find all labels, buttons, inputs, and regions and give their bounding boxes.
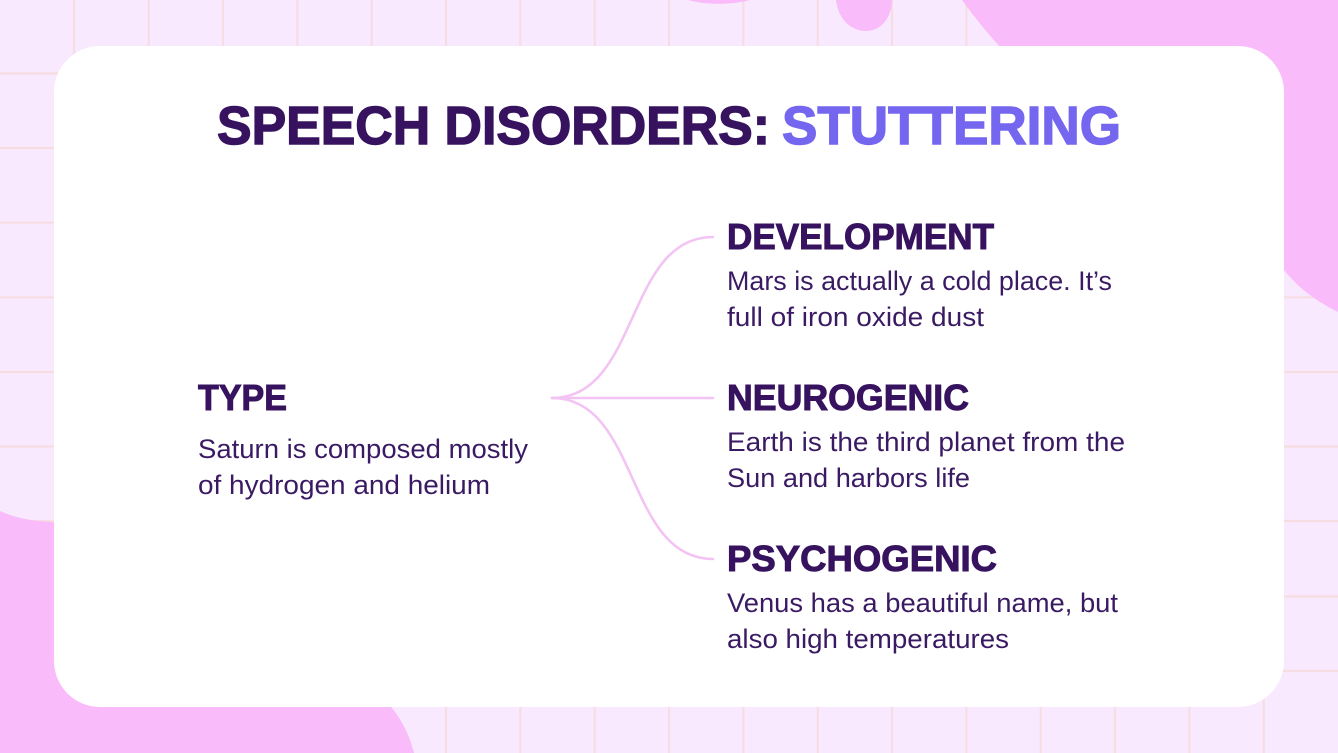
blob: top small: [688, 0, 750, 4]
text block: development: full of iron oxide dust: [727, 302, 985, 332]
title: SPEECH DISORDERS:: [217, 96, 770, 156]
blob: top circle: [836, 0, 892, 31]
text block: type: of hydrogen and helium: [198, 470, 490, 500]
connector: branching lines: [552, 237, 713, 559]
title: STUTTERING: [782, 96, 1121, 156]
text block: neurogenic: Earth is the third planet from the: [727, 427, 1125, 457]
text block: development: [727, 216, 1112, 332]
text block: type: Saturn is composed mostly: [198, 434, 529, 464]
text block: development: Mars is actually a cold place. It’s: [727, 266, 1112, 296]
blob: bottom left: [0, 511, 414, 753]
text block: psychogenic: also high temperatures: [727, 624, 1009, 654]
title: [217, 96, 1121, 156]
text block: type: [198, 377, 529, 500]
text block: neurogenic: Sun and harbors life: [727, 463, 970, 493]
text block: psychogenic: PSYCHOGENIC: [727, 538, 997, 579]
text block: neurogenic: NEUROGENIC: [727, 377, 969, 418]
text block: psychogenic: Venus has a beautiful name, but: [727, 588, 1119, 618]
blob: top right: [962, 0, 1338, 312]
text block: development: DEVELOPMENT: [727, 216, 994, 257]
text block: psychogenic: [727, 538, 1119, 654]
text block: type: TYPE: [198, 377, 287, 418]
text block: neurogenic: [727, 377, 1125, 493]
